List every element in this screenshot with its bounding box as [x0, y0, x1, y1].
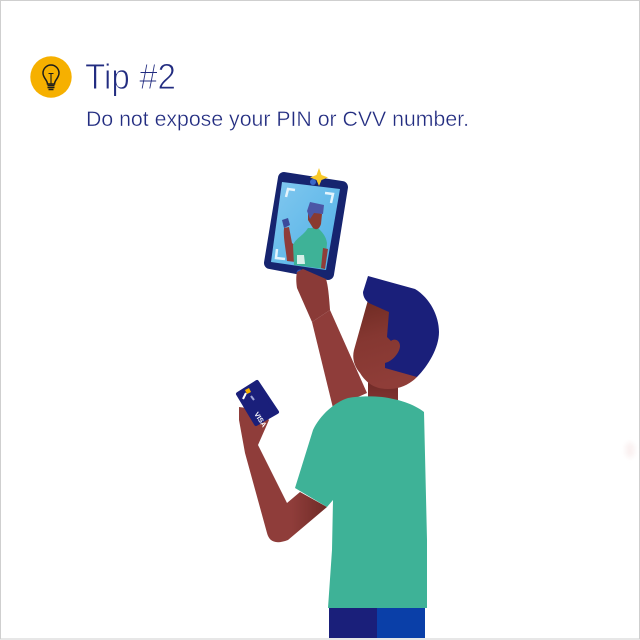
- tablet screen: [271, 182, 340, 270]
- holding arm: [239, 407, 327, 542]
- icon: light bulb badge: [30, 56, 72, 98]
- payment card: [238, 382, 277, 429]
- subtitle: Do not expose your PIN or CVV number.: [86, 108, 469, 131]
- viewfinder corners: [276, 189, 333, 265]
- payment card: VISA: [252, 411, 267, 429]
- illustration: person photographing card: [238, 168, 439, 638]
- t-shirt: [295, 396, 427, 608]
- hand on tablet: [296, 269, 330, 322]
- tablet: [270, 168, 342, 276]
- trousers: [329, 608, 425, 638]
- sparkle: [310, 168, 328, 186]
- selfie hair: [307, 202, 324, 219]
- camera dot: [310, 179, 316, 185]
- raised arm: [312, 310, 367, 408]
- tablet button: [296, 270, 304, 276]
- neck: [368, 380, 398, 400]
- selfie shirt: [293, 228, 327, 269]
- selfie arm: [284, 227, 298, 262]
- hair: [363, 276, 439, 377]
- selfie card: [282, 218, 290, 228]
- title: Tip #2: [85, 56, 176, 97]
- faint smudge: [625, 442, 635, 458]
- head: [353, 300, 417, 389]
- camera icon: [297, 255, 305, 264]
- selfie head: [308, 210, 322, 229]
